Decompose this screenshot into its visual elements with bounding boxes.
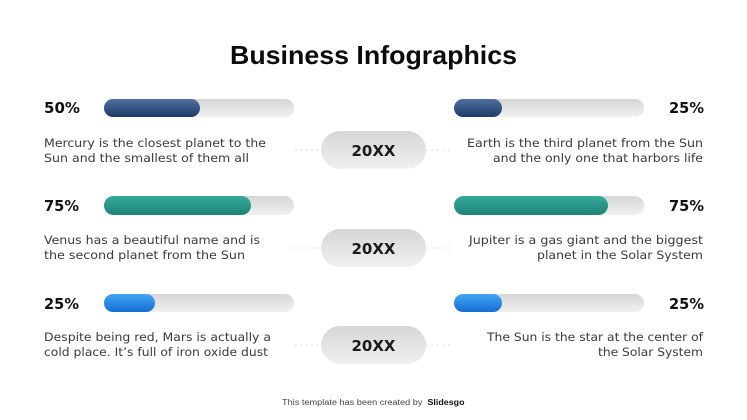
progress bar: 75% <box>454 196 644 215</box>
description: Earth: and the only one that harbors life <box>493 151 703 165</box>
description: Earth: Earth is the third planet from the Sun <box>467 136 703 150</box>
description: Jupiter: Jupiter is a gas giant and the biggest <box>468 233 704 247</box>
percentage: 25%: 25% <box>669 295 704 313</box>
panel: Mercury 50% <box>44 99 294 165</box>
description: Sun: The Sun is the star at the center of <box>486 330 704 344</box>
description: Venus: the second planet from the Sun <box>44 248 245 262</box>
panel: Venus 75% <box>44 196 294 262</box>
description: Mercury: Sun and the smallest of them all <box>44 151 249 165</box>
description: Mercury: Mercury is the closest planet to the <box>44 136 266 150</box>
percentage: 75%: 75% <box>44 197 79 215</box>
progress bar: 50% <box>104 99 294 117</box>
year pill: row 1 <box>295 131 453 169</box>
progress bar: 25% <box>104 294 294 312</box>
panel: Earth 25% <box>454 99 704 165</box>
footer credit: Slidesgo <box>428 398 465 407</box>
panel: Sun 25% <box>454 294 704 359</box>
panel: Jupiter 75% <box>454 196 704 262</box>
percentage: 75%: 75% <box>669 197 704 215</box>
description: Venus: Venus has a beautiful name and is <box>44 233 260 247</box>
year pill: row 3: 20XX <box>352 337 396 355</box>
year pill: row 2: 20XX <box>352 240 396 258</box>
percentage: 25%: 25% <box>669 99 704 117</box>
year pill: row 1: 20XX <box>352 142 396 160</box>
panel: Mars 25% <box>44 294 294 359</box>
percentage: 25%: 25% <box>44 295 79 313</box>
title: Business Infographics <box>230 40 517 70</box>
description: Mars: Despite being red, Mars is actually a <box>44 330 271 344</box>
footer credit: This template has been created by <box>282 398 425 407</box>
description: Jupiter: planet in the Solar System <box>537 248 703 262</box>
progress bar: 75% <box>104 196 294 215</box>
description: Sun: the Solar System <box>598 345 703 359</box>
progress bar: 25% <box>454 294 644 312</box>
year pill: row 3 <box>295 326 453 364</box>
description: Mars: cold place. It’s full of iron oxide dust <box>44 345 269 359</box>
progress bar: 25% <box>454 99 644 117</box>
percentage: 50%: 50% <box>44 99 80 117</box>
year pill: row 2 <box>295 229 453 267</box>
